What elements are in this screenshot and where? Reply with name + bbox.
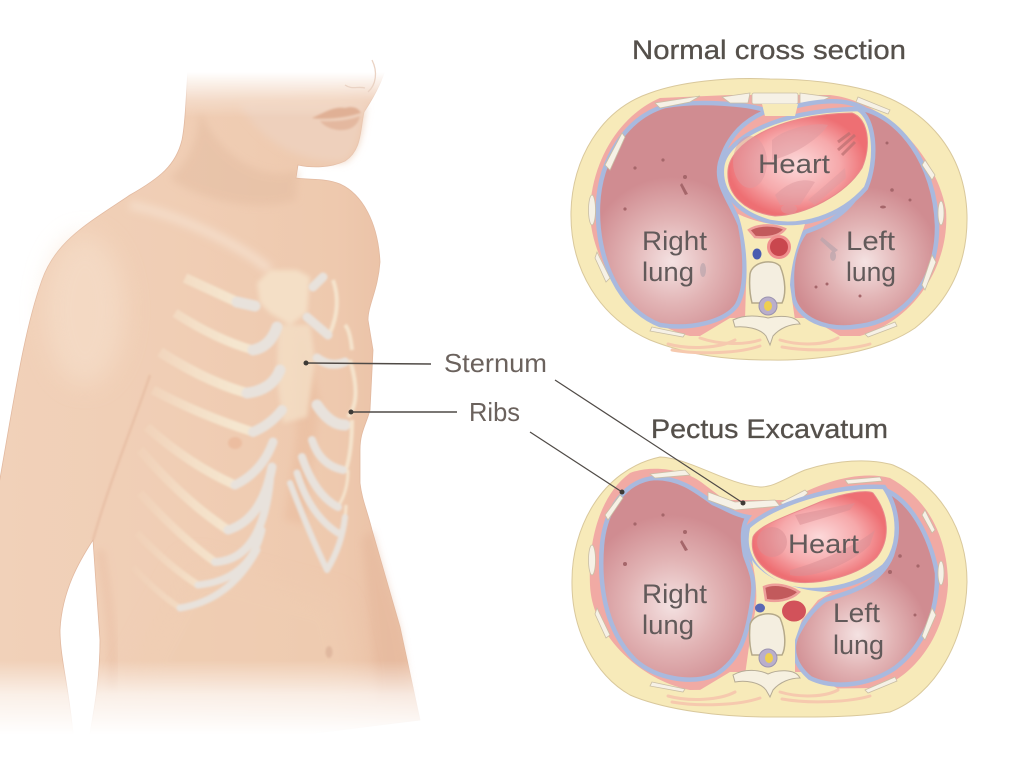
back muscle [668,672,870,706]
left-side ribs [290,277,356,570]
muscle ring [590,95,946,336]
spinal cord [759,649,777,667]
right side shading [372,530,410,672]
back muscle [668,318,870,353]
body outer wall [572,457,967,717]
lung specks [623,142,912,298]
organ labels: lung [833,630,884,660]
organ labels: lung [846,257,896,287]
callout: sternum [304,348,746,506]
bronchi marks [700,237,838,277]
pectus excavatum cross section diagram [572,457,967,717]
heading: normal cross section: Normal cross section [632,35,906,65]
heading: pectus excavatum: Pectus Excavatum [651,414,888,444]
vena cava [752,248,762,260]
pericardium [722,109,873,224]
skin silhouette [0,40,420,745]
vertebra [750,614,785,655]
organ labels: lung [642,257,694,287]
callout: ribs [348,397,624,494]
spinous process [733,316,800,345]
lung specks [623,513,920,616]
neck shading [177,128,302,200]
organ labels: Heart [758,149,831,179]
sternum and rib bones [588,470,944,693]
right lung [598,103,767,326]
nose hint [345,60,375,92]
jaw shading [240,105,366,162]
pericardium [746,487,897,590]
organ labels [642,149,896,287]
heart [728,113,867,216]
navel [326,646,332,658]
organ labels: Heart [788,529,860,559]
chest shading [288,391,315,520]
heart chambers [733,124,846,214]
nipple [228,437,242,449]
organ labels [642,529,884,660]
left lung [794,490,937,685]
sternum and rib bones [588,93,944,337]
muscle ring [590,469,948,690]
left lung [792,108,937,327]
heart [752,492,886,583]
body outer wall [571,79,967,360]
esophagus [764,585,799,601]
torso illustration [0,40,420,745]
mediastinum [738,214,805,320]
normal cross section diagram [571,79,967,360]
esophagus [749,225,785,237]
spinous process [733,670,800,697]
aorta [768,236,790,258]
aorta [782,600,806,622]
callout: ribs: Ribs [469,397,520,427]
organ labels: Right [642,226,708,256]
heart chambers [757,503,875,576]
right lung [601,478,753,680]
mouth [312,107,361,130]
spinal cord [759,297,777,315]
mediastinum [745,560,832,675]
right-side ribs [133,278,282,608]
organ labels: Left [833,598,881,628]
pleura top arc [793,101,866,110]
organ labels: Left [846,226,896,256]
organ labels: Right [642,579,708,609]
organ labels: lung [642,610,694,640]
vertebra [750,262,785,303]
arm crease [93,375,150,540]
callout: sternum: Sternum [444,348,547,378]
sternum [257,270,315,423]
collarbone shade [130,205,270,270]
vena cava [755,604,765,612]
shoulder highlight [45,235,125,385]
